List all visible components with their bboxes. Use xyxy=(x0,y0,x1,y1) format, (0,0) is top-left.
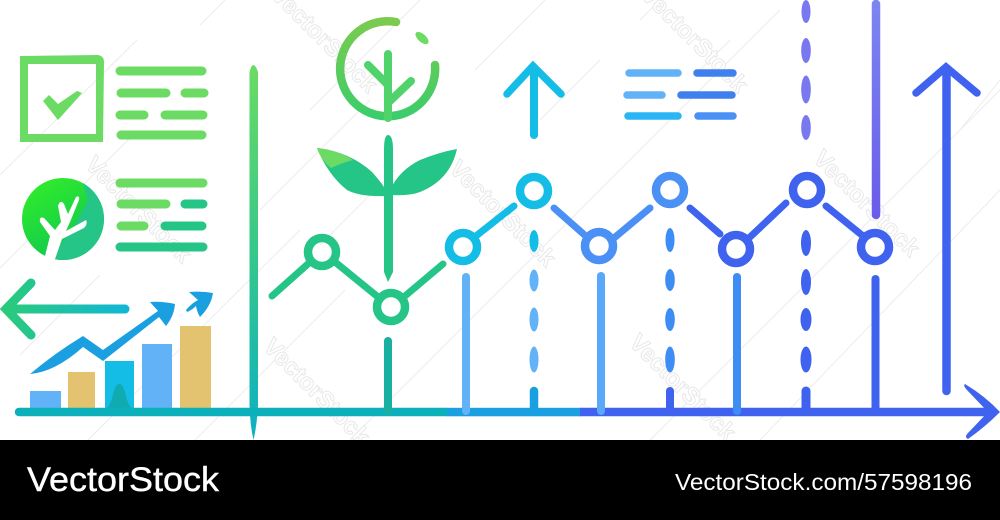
text lines: checkbox list xyxy=(120,71,204,135)
plant stem and leaves xyxy=(317,135,457,282)
dashed line: upper violet xyxy=(801,0,811,140)
line chart: blue section xyxy=(449,176,889,263)
text: VectorStock xyxy=(808,145,925,263)
bar chart xyxy=(30,326,211,409)
trend arrow xyxy=(30,292,213,374)
arrow: blue up xyxy=(916,67,977,391)
footer bar xyxy=(0,440,1000,520)
arrow: cyan up xyxy=(507,66,561,135)
horizontal axis with arrow xyxy=(19,384,1000,439)
tall violet line xyxy=(872,4,880,215)
text: VectorStock xyxy=(80,151,197,269)
arrow: left pointing xyxy=(6,283,125,335)
icon: leaf badge xyxy=(22,178,104,260)
footer image id text: VectorStock.com/57598196 xyxy=(675,469,972,495)
text: VectorStock xyxy=(444,155,561,273)
drop lines from data points xyxy=(388,228,876,411)
line chart: green section xyxy=(272,238,443,321)
text lines: blue list xyxy=(627,73,733,116)
vertical axis xyxy=(250,65,258,440)
text lines: leaf list xyxy=(120,183,203,247)
text: VectorStock xyxy=(624,329,741,447)
icon: plant in ring xyxy=(340,21,435,118)
text: VectorStock xyxy=(258,333,375,451)
footer logo text: VectorStock xyxy=(27,461,220,499)
icon: checkbox with tick xyxy=(20,55,104,142)
